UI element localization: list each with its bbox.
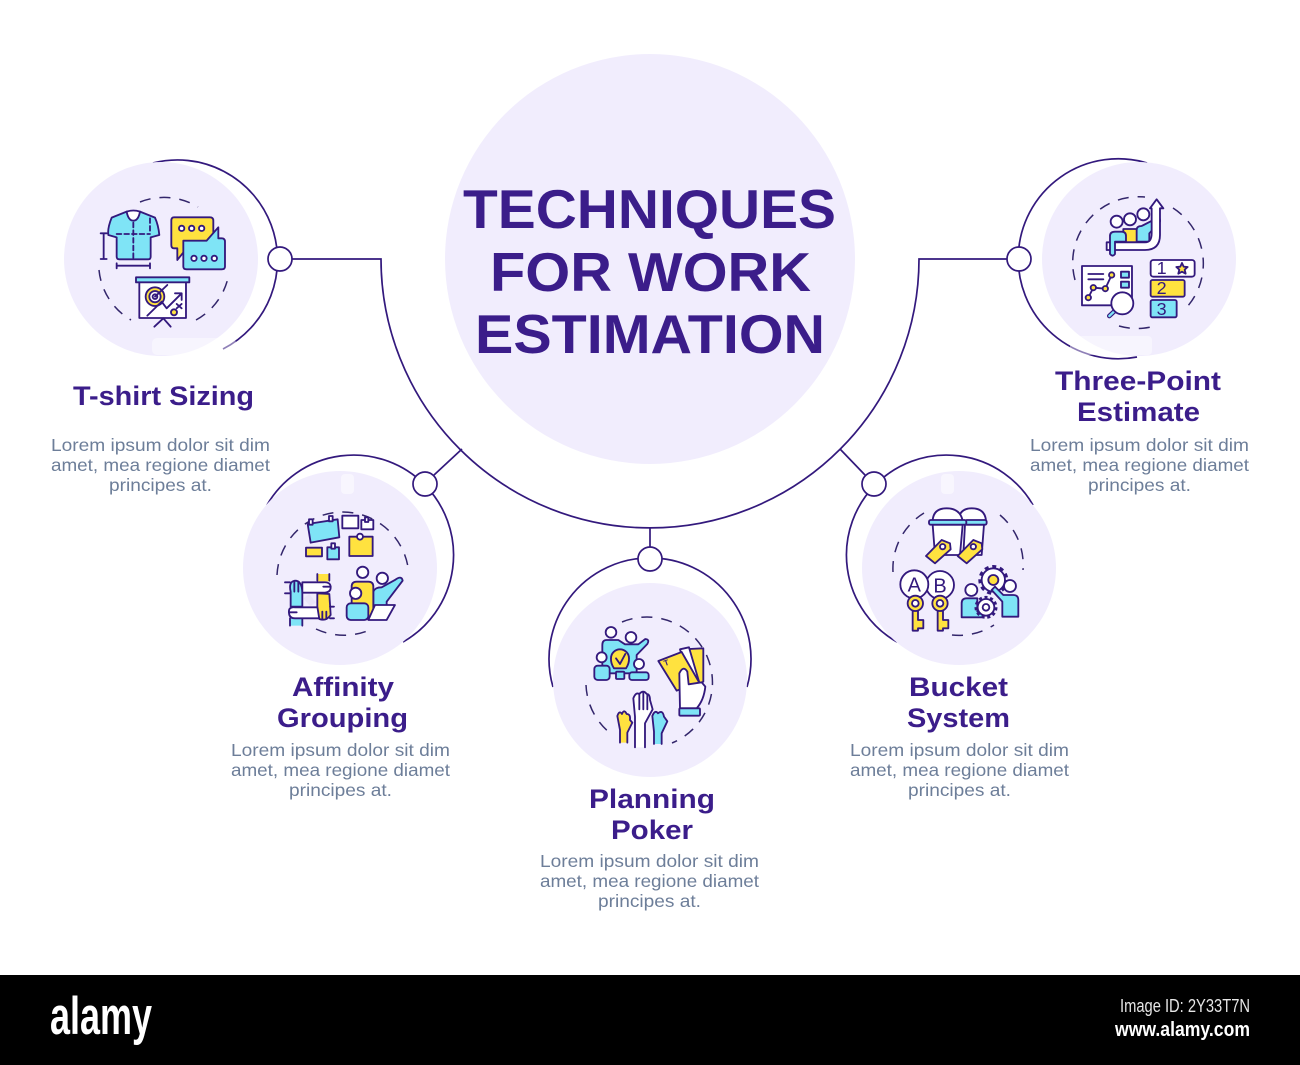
text block: Planning Poker: amet, mea regione diamet bbox=[540, 871, 759, 891]
title: TECHNIQUES bbox=[463, 178, 836, 240]
heading: Affinity Grouping bbox=[277, 672, 408, 733]
icon: team growth, chart and ranking: 2 bbox=[1157, 278, 1167, 298]
text block: Planning Poker bbox=[540, 851, 759, 911]
icon: team growth, chart and ranking bbox=[1082, 199, 1195, 319]
heading: Affinity Grouping: Affinity bbox=[292, 672, 394, 702]
heading: Three-Point Estimate bbox=[1055, 366, 1221, 427]
text block: Planning Poker: principes at. bbox=[598, 891, 701, 911]
icon: cups with tags, keys and gears team: B bbox=[933, 575, 947, 597]
heading: Planning Poker: Poker bbox=[611, 815, 694, 845]
panel: central title bbox=[445, 54, 855, 464]
icon: team growth, chart and ranking: 3 bbox=[1157, 299, 1167, 319]
text block: Affinity Grouping: principes at. bbox=[289, 780, 392, 800]
icon: cups with tags, keys and gears team bbox=[900, 508, 1018, 631]
icon: cups with tags, keys and gears team: A bbox=[908, 575, 922, 597]
heading: Planning Poker: Planning bbox=[589, 784, 715, 814]
text block: Three-Point Estimate: Lorem ipsum dolor sit dim bbox=[1030, 435, 1249, 455]
text block: Planning Poker: Lorem ipsum dolor sit dim bbox=[540, 851, 759, 871]
panel: Planning Poker bbox=[540, 547, 759, 911]
heading: T-shirt Sizing: T-shirt Sizing bbox=[73, 381, 254, 411]
heading: Three-Point Estimate: Three-Point bbox=[1055, 366, 1221, 396]
footer bar bbox=[0, 975, 1300, 1065]
text block: T-shirt Sizing bbox=[51, 435, 270, 495]
icon: t-shirt, chat bubbles and target board bbox=[101, 210, 225, 327]
icon: team idea, playing cards and raised hands: T bbox=[663, 658, 670, 668]
icon: team growth, chart and ranking: 1 bbox=[1157, 258, 1167, 278]
website: www.alamy.com bbox=[1114, 1019, 1250, 1041]
text block: T-shirt Sizing: amet, mea regione diamet bbox=[51, 455, 270, 475]
panel: Affinity Grouping bbox=[231, 455, 454, 800]
text block: Affinity Grouping: amet, mea regione diamet bbox=[231, 760, 450, 780]
text block: Bucket System: amet, mea regione diamet bbox=[850, 760, 1069, 780]
text block: Affinity Grouping bbox=[231, 740, 450, 800]
text block: Affinity Grouping: Lorem ipsum dolor sit dim bbox=[231, 740, 450, 760]
text block: Bucket System: Lorem ipsum dolor sit dim bbox=[850, 740, 1069, 760]
text block: Three-Point Estimate bbox=[1030, 435, 1249, 495]
heading: Three-Point Estimate: Estimate bbox=[1077, 397, 1200, 427]
footer logo: alamy bbox=[50, 987, 152, 1046]
text block: Bucket System bbox=[850, 740, 1069, 800]
icon: sticky notes, joined hands and team bbox=[285, 516, 403, 626]
panel: Three-Point Estimate bbox=[1007, 159, 1249, 495]
title bbox=[463, 178, 836, 365]
text block: Three-Point Estimate: amet, mea regione diamet bbox=[1030, 455, 1249, 475]
image id: Image ID: 2Y33T7N bbox=[1120, 996, 1250, 1016]
panel: T-shirt Sizing bbox=[51, 160, 292, 495]
heading: Planning Poker bbox=[589, 784, 715, 845]
title: ESTIMATION bbox=[475, 303, 825, 365]
title: FOR WORK bbox=[490, 241, 811, 303]
heading: Bucket System bbox=[907, 672, 1010, 733]
heading: Bucket System: System bbox=[907, 703, 1010, 733]
text block: Bucket System: principes at. bbox=[908, 780, 1011, 800]
heading: Affinity Grouping: Grouping bbox=[277, 703, 408, 733]
panel: Bucket System bbox=[846, 455, 1069, 800]
text block: T-shirt Sizing: Lorem ipsum dolor sit dim bbox=[51, 435, 270, 455]
text block: Three-Point Estimate: principes at. bbox=[1088, 475, 1191, 495]
connector arc linking all techniques bbox=[292, 259, 1008, 547]
text block: T-shirt Sizing: principes at. bbox=[109, 475, 212, 495]
icon: team idea, playing cards and raised hands bbox=[594, 627, 705, 747]
heading: Bucket System: Bucket bbox=[909, 672, 1008, 702]
